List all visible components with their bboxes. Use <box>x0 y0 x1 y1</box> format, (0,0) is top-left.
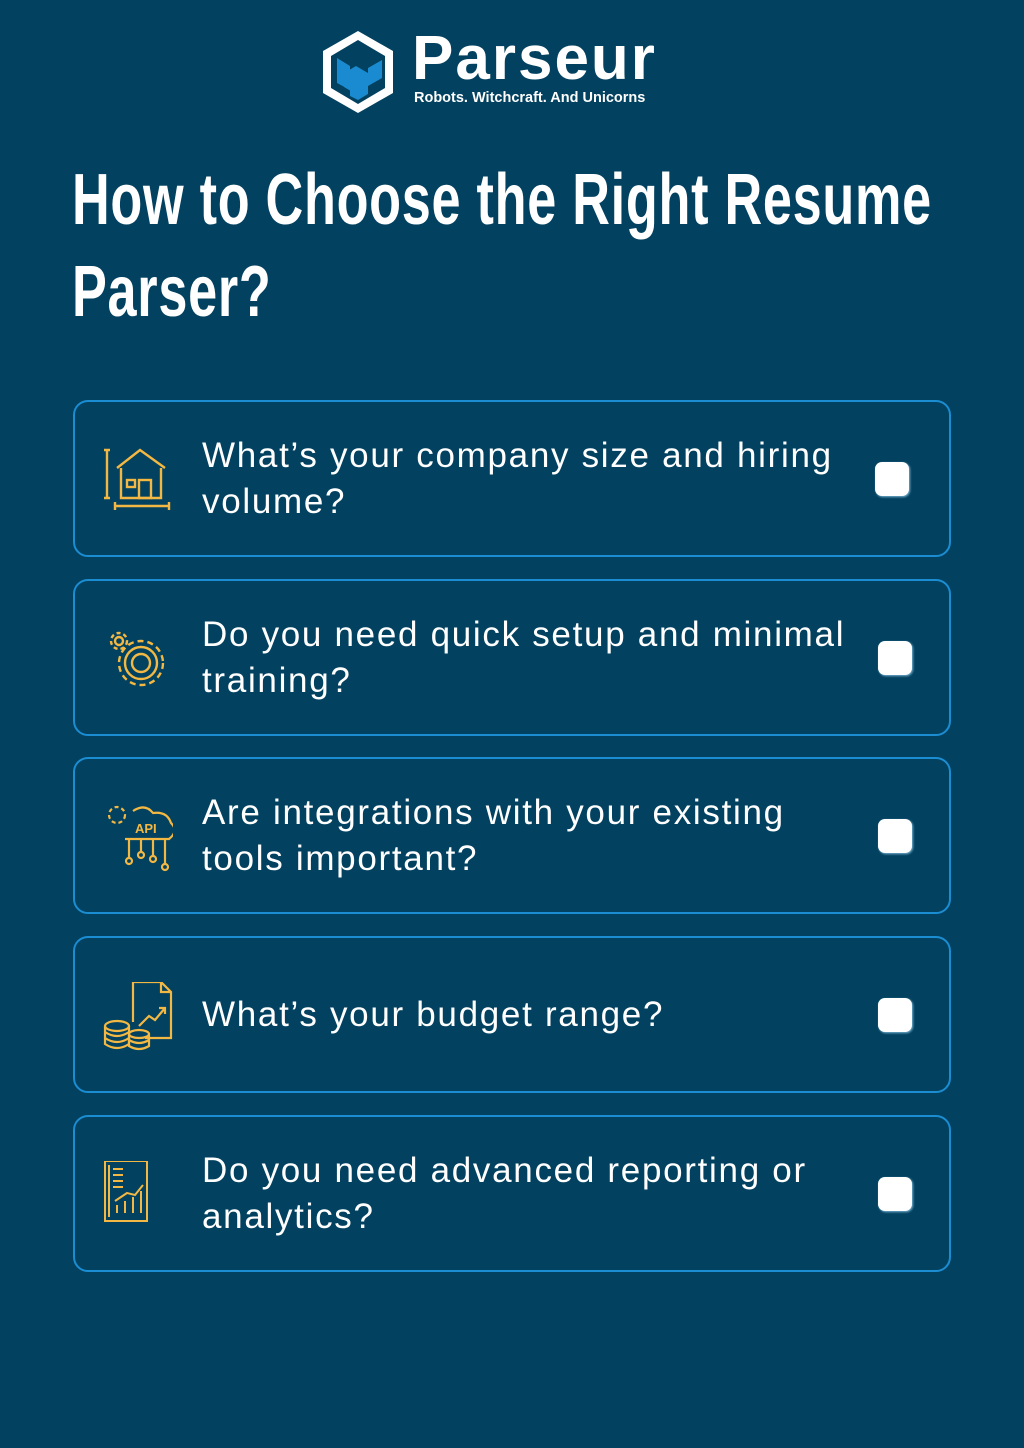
card 5: analytics? <box>202 1196 375 1236</box>
checkbox <box>875 462 909 496</box>
title <box>72 160 932 332</box>
tagline: Robots. Witchcraft. And Unicorns <box>414 90 645 106</box>
card 2: training? <box>202 660 352 700</box>
card 2 <box>73 579 951 736</box>
checkbox <box>878 1177 912 1211</box>
logo <box>323 24 657 113</box>
icon: house <box>104 448 170 510</box>
icon: budget coins <box>104 982 172 1050</box>
card 1: What’s your company size and hiring <box>202 436 833 474</box>
checkbox <box>878 641 912 675</box>
icon: parseur hexagon <box>323 31 393 113</box>
icon: API cloud <box>108 806 173 872</box>
card 4: What’s your budget range? <box>202 994 664 1034</box>
title: How to Choose the Right Resume <box>72 160 932 240</box>
card 1 <box>73 400 951 557</box>
card 3 <box>73 757 951 914</box>
card 3: Are integrations with your existing <box>202 792 785 832</box>
icon: report <box>104 1161 148 1222</box>
icon: gears <box>110 632 164 686</box>
card 2: Do you need quick setup and minimal <box>202 614 845 654</box>
card 5: Do you need advanced reporting or <box>202 1150 807 1190</box>
card 3: tools important? <box>202 838 478 878</box>
title: Parser? <box>72 252 271 332</box>
card 4 <box>73 936 951 1093</box>
icon: API cloud: API <box>135 821 157 836</box>
checkbox <box>878 819 912 853</box>
card 5 <box>73 1115 951 1272</box>
checkbox <box>878 998 912 1032</box>
card 1: volume? <box>202 482 346 520</box>
brand name: Parseur <box>412 24 657 93</box>
